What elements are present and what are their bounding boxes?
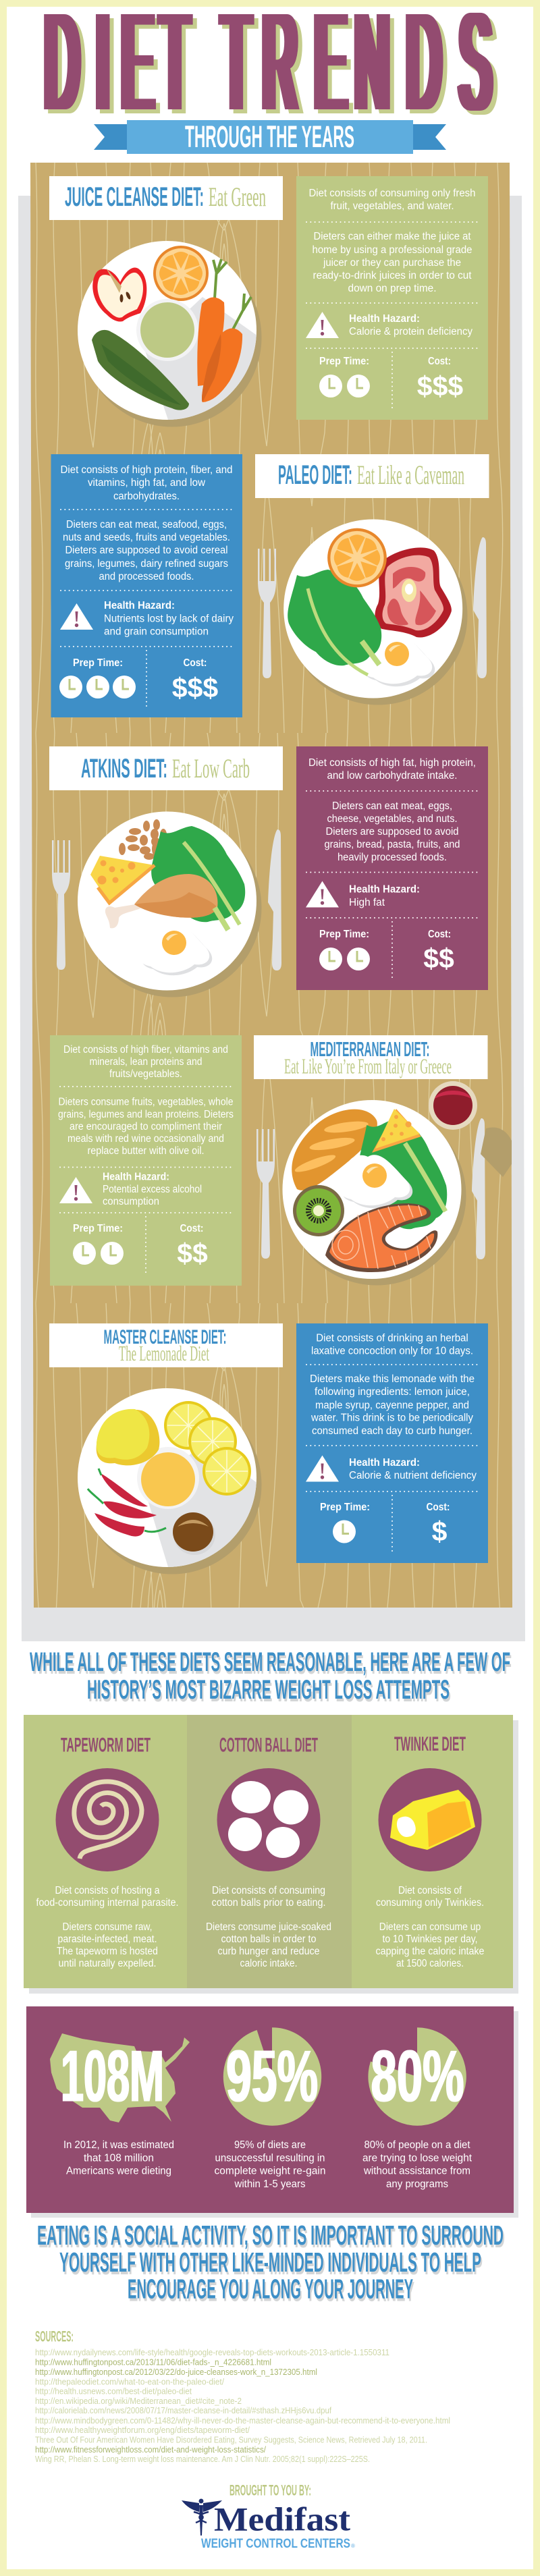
text: how it works: following ingredients: lemon juice, <box>315 1386 470 1398</box>
text: health hazard <box>349 313 473 337</box>
text: what the diet is: minerals, lean proteins and <box>89 1056 202 1068</box>
heading: juice cleanse diet <box>49 176 283 220</box>
text: how it works: cheese, vegetables, and nuts. <box>327 813 458 825</box>
text: how it works: maple syrup, cayenne pepper, and <box>315 1400 469 1411</box>
icon: caduceus <box>182 2498 222 2536</box>
panel: paleo details <box>51 454 242 717</box>
section: juice cleanse diet <box>49 176 488 427</box>
sources: http://www.healthyweightforum.org/eng/diets/tapeworm-diet/ <box>35 2426 250 2435</box>
prep time: Prep Time: <box>320 1502 370 1513</box>
sources: http://calorielab.com/news/2008/07/17/master-cleanse-in-detail/#sthash.zHHjs6vu.dpuf <box>35 2406 331 2415</box>
text: how it works: juicer or they can purchase the <box>323 257 461 269</box>
text: how it works: grains, legumes and lean proteins. Dieters <box>58 1109 234 1120</box>
text: what the diet is: laxative concoction only for 10 days. <box>311 1346 473 1356</box>
icon: fork <box>258 549 276 678</box>
text: how it works <box>310 1373 475 1437</box>
sources: http://health.usnews.com/best-diet/paleo-diet <box>35 2386 192 2396</box>
text: twinkie description: Diet consists of <box>398 1885 462 1896</box>
text: what the diet is <box>63 1044 228 1080</box>
cost <box>177 1223 208 1269</box>
text: health hazard <box>349 884 420 908</box>
column: twinkie diet: TWINKIE DIET <box>394 1733 466 1755</box>
text: how it works: down on prep time. <box>348 283 436 294</box>
text: BROUGHT TO YOU BY: <box>230 2482 311 2498</box>
text: what the diet is: Diet consists of high fiber, vitamins and <box>63 1044 228 1056</box>
cost: Cost: <box>428 929 451 940</box>
cost: $$ <box>423 943 454 974</box>
stat: 95 percent <box>215 2027 325 2190</box>
cost <box>417 356 463 402</box>
plate: meat, greens and egg <box>284 520 467 705</box>
icon: knife <box>472 1118 485 1259</box>
cost <box>427 1502 450 1547</box>
text: twinkie description: to 10 Twinkies per day, <box>382 1934 478 1945</box>
text: tapeworm description: parasite-infected, meat. <box>58 1934 157 1945</box>
heading: mediterranean diet <box>254 1035 487 1079</box>
text: health hazard <box>104 600 234 637</box>
text: health hazard: Health Hazard: <box>349 313 420 325</box>
text: 80 percent description: are trying to lose weight <box>362 2153 473 2164</box>
text: health hazard: Calorie & nutrient deficiency <box>349 1470 477 1481</box>
stat: 108 million: 108M <box>61 2035 164 2118</box>
text: cotton ball description: Diet consists of consuming <box>212 1885 325 1896</box>
text: how it works: Dieters can either make the juice at <box>313 231 471 242</box>
icon: hazard warning <box>59 1177 92 1203</box>
wine glass shadow <box>481 1127 512 1177</box>
heading: atkins diet <box>49 746 283 790</box>
closing statement <box>37 2220 504 2304</box>
prep time <box>320 1502 370 1543</box>
sources <box>35 2328 450 2464</box>
column: tapeworm diet: TAPEWORM DIET <box>61 1734 151 1756</box>
stat: 80 percent: 80% <box>371 2035 464 2118</box>
icon: cotton balls <box>217 1768 320 1871</box>
plate: chicken, cheese, nuts and egg <box>78 811 262 997</box>
icon: fork <box>52 840 70 970</box>
text: health hazard: Health Hazard: <box>103 1172 169 1182</box>
logo: medifast <box>182 2498 355 2551</box>
plate: fruit and vegetables <box>78 241 262 427</box>
text: what the diet is <box>309 188 475 212</box>
text: how it works <box>312 231 473 294</box>
text: how it works: and processed foods. <box>99 571 194 582</box>
section: atkins diet <box>49 746 488 997</box>
sources: http://www.mindbodygreen.com/0-11482/why-ill-never-do-the-master-cleanse-again-but-recommend-it-to-everyone.html <box>35 2416 450 2426</box>
text: twinkie description: Dieters can consume up <box>379 1921 481 1933</box>
text: how it works: heavily processed foods. <box>338 852 447 863</box>
sources: http://en.wikipedia.org/wiki/Mediterranean_diet#cite_note-2 <box>35 2396 242 2406</box>
section: mediterranean diet <box>50 1035 512 1286</box>
prep time <box>319 929 370 970</box>
icon: hazard warning <box>306 1455 339 1482</box>
text: tapeworm description: Dieters consume raw, <box>62 1921 153 1933</box>
text: what the diet is: vitamins, high fat, and low <box>88 477 206 489</box>
cost: Cost: <box>428 356 451 367</box>
text: how it works: Dieters can eat meat, eggs, <box>332 800 452 812</box>
icon: glass of red wine <box>429 1081 477 1130</box>
prep time: Prep Time: <box>319 929 369 940</box>
text: how it works: Dieters are supposed to avoid <box>325 826 459 838</box>
text: health hazard: consumption <box>103 1196 159 1207</box>
icon: twinkie <box>378 1768 482 1871</box>
section: paleo diet <box>51 454 489 717</box>
text: health hazard: Calorie & protein deficiency <box>349 326 473 337</box>
sources: http://www.nydailynews.com/life-style/health/google-reveals-top-diets-workouts-2013-article-1.1550311 <box>35 2348 389 2357</box>
text: health hazard: Potential excess alcohol <box>103 1184 202 1195</box>
column: cotton ball diet <box>206 1734 331 1969</box>
cost: $ <box>432 1516 448 1547</box>
text: tapeworm description <box>36 1885 178 1969</box>
text: how it works <box>63 519 230 582</box>
prep time: Prep Time: <box>73 657 123 669</box>
text: health hazard: Health Hazard: <box>349 1457 420 1469</box>
sources: Three Out Of Four American Women Have Disordered Eating, Survey Suggests, Science News, Retrieved July 18, 2011. <box>35 2435 427 2444</box>
cost <box>423 929 454 974</box>
text: health hazard <box>349 1457 477 1481</box>
cost: $$$ <box>172 672 218 703</box>
sources: http://www.huffingtonpost.ca/2012/03/22/do-juice-cleanses-work_n_1372305.html <box>35 2367 317 2377</box>
pie chart: 80 percent <box>368 2027 466 2126</box>
cost: Cost: <box>184 657 207 669</box>
stat: 80 percent <box>362 2027 473 2190</box>
grey backing panel <box>18 196 525 1641</box>
cost: $$$ <box>417 371 463 402</box>
heading: bizarre weight loss attempts <box>30 1647 510 1705</box>
icon: tapeworm <box>55 1768 159 1871</box>
text: how it works: Dieters are supposed to avoid cereal <box>65 545 228 556</box>
column: tapeworm diet <box>36 1734 178 1969</box>
text: what the diet is <box>61 464 232 502</box>
icon: hazard warning <box>306 881 339 907</box>
text: health hazard: Health Hazard: <box>104 600 175 611</box>
text: cotton ball description: cotton balls prior to eating. <box>212 1897 325 1909</box>
text: how it works: nuts and seeds, fruits and vegetables. <box>63 532 230 543</box>
sources: http://thepaleodiet.com/what-to-eat-on-the-paleo-diet/ <box>35 2377 224 2386</box>
text: how it works: home by using a professional grade <box>312 244 473 256</box>
column: cotton ball diet: COTTON BALL DIET <box>219 1734 318 1756</box>
text: twinkie description: at 1500 calories. <box>396 1958 464 1969</box>
wood table <box>30 163 512 1608</box>
text: 80 percent description: 80% of people on a diet <box>364 2139 470 2151</box>
text: 95 percent description <box>215 2139 325 2190</box>
text: twinkie description <box>375 1885 485 1969</box>
panel: mediterranean details <box>50 1035 242 1286</box>
sources: Wing RR, Phelan S. Long-term weight loss maintenance. Am J Clin Nutr. 2005;82(1 suppl):222S–225S. <box>35 2455 370 2464</box>
icon: knife <box>268 829 281 970</box>
sources: http://www.huffingtonpost.ca/2013/11/06/diet-fads-_n_4226681.html <box>35 2358 271 2367</box>
text: what the diet is: fruit, vegetables, and water. <box>331 200 454 212</box>
stat: 108 million <box>50 2033 190 2177</box>
text: health hazard: Nutrients lost by lack of dairy <box>104 613 234 625</box>
text: how it works: Dieters make this lemonade with the <box>310 1373 475 1385</box>
text: tapeworm description: until naturally expelled. <box>58 1958 157 1969</box>
text: 95 percent description: within 1-5 years <box>234 2178 306 2190</box>
panel: juice cleanse details <box>296 176 488 420</box>
text: what the diet is: Diet consists of drinking an herbal <box>316 1332 468 1344</box>
text: 80 percent description <box>362 2139 473 2190</box>
text: how it works: replace butter with olive oil. <box>88 1145 204 1157</box>
text: how it works: water. This drink is to be periodically <box>310 1412 473 1424</box>
cost <box>172 657 218 703</box>
text: twinkie description: consuming only Twinkies. <box>376 1897 484 1909</box>
prep time <box>319 356 370 398</box>
text: 108 million description: In 2012, it was estimated <box>63 2139 174 2151</box>
text: what the diet is <box>311 1332 473 1356</box>
prep time: Prep Time: <box>319 356 369 367</box>
heading: master cleanse diet <box>49 1323 283 1367</box>
text: cotton ball description: cotton balls in order to <box>221 1934 316 1945</box>
text: how it works: meals with red wine occasionally and <box>68 1133 224 1145</box>
text: cotton ball description <box>206 1885 331 1969</box>
text: twinkie description: capping the caloric intake <box>375 1946 485 1957</box>
text: tapeworm description: food-consuming internal parasite. <box>36 1897 178 1909</box>
text: what the diet is: Diet consists of high protein, fiber, and <box>61 464 232 476</box>
plate: lemons, peppers and syrup <box>78 1388 262 1574</box>
text: what the diet is: carbohydrates. <box>113 491 180 502</box>
icon: knife <box>473 537 487 678</box>
logo: medifast: WEIGHT CONTROL CENTERS <box>201 2537 350 2551</box>
icon: hazard warning <box>60 603 93 630</box>
heading: master cleanse diet: MASTER CLEANSE DIET: <box>104 1326 227 1348</box>
text: 95 percent description: complete weight re-gain <box>215 2165 325 2177</box>
prep time <box>59 657 136 698</box>
heading: paleo diet: PALEO DIET: <box>278 460 352 490</box>
text: how it works: grains, bread, pasta, fruits, and <box>324 839 460 850</box>
text: 108 million description: that 108 million <box>84 2153 154 2164</box>
icon: hazard warning <box>306 312 339 338</box>
map: united states <box>50 2033 190 2122</box>
plate: bread, salmon, kiwi and egg <box>282 1100 466 1285</box>
icon: fork <box>256 1129 275 1259</box>
text: how it works: ready-to-drink juices in order to cut <box>313 270 472 281</box>
pie chart: 95 percent <box>223 2027 321 2126</box>
text: health hazard: Health Hazard: <box>349 884 420 895</box>
text: cotton ball description: curb hunger and reduce <box>217 1946 320 1957</box>
heading: atkins diet: ATKINS DIET: <box>81 754 167 784</box>
cost: Cost: <box>180 1223 204 1234</box>
text: how it works: Dieters consume fruits, vegetables, whole <box>58 1096 234 1108</box>
text: cotton ball description: Dieters consume juice-soaked <box>206 1921 331 1933</box>
prep time <box>73 1223 124 1265</box>
logo: medifast: Medifast <box>214 2500 350 2538</box>
ribbon subtitle: THROUGH THE YEARS <box>185 119 354 154</box>
text: tapeworm description: Diet consists of hosting a <box>55 1885 160 1896</box>
text: health hazard: High fat <box>349 897 385 908</box>
sources: http://www.fitnessforweightloss.com/diet-and-weight-loss-statistics/ <box>35 2445 266 2455</box>
stat: 95 percent: 95% <box>226 2035 318 2118</box>
panel: master cleanse details <box>296 1323 488 1563</box>
text: 108 million description: Americans were dieting <box>66 2165 171 2177</box>
heading: juice cleanse diet: JUICE CLEANSE DIET: <box>65 182 204 212</box>
text: how it works: grains, legumes, dairy refined sugars <box>65 558 228 570</box>
sources: SOURCES: <box>35 2328 74 2345</box>
text: how it works <box>58 1096 234 1157</box>
text: 95 percent description: unsuccessful resulting in <box>215 2153 325 2164</box>
text: 95 percent description: 95% of diets are <box>234 2139 306 2151</box>
column: twinkie diet <box>375 1733 485 1969</box>
text: how it works <box>324 800 460 863</box>
prep time: Prep Time: <box>73 1223 123 1234</box>
text: health hazard: and grain consumption <box>104 626 209 637</box>
text: cotton ball description: caloric intake. <box>240 1958 297 1969</box>
heading: juice cleanse diet: Eat Green <box>209 182 266 212</box>
text: 80 percent description: any programs <box>386 2178 448 2190</box>
text: health hazard <box>103 1172 202 1207</box>
text: what the diet is: Diet consists of consuming only fresh <box>309 188 475 199</box>
panel: dieting statistics <box>26 2006 518 2218</box>
text: 80 percent description: without assistance from <box>363 2165 470 2177</box>
text: how it works: Dieters can eat meat, seafood, eggs, <box>66 519 227 530</box>
text: what the diet is: and low carbohydrate intake. <box>327 770 458 782</box>
section: master cleanse diet <box>49 1323 488 1574</box>
text: 108 million description <box>63 2139 174 2177</box>
panel: atkins details <box>296 746 488 990</box>
text: what the diet is <box>308 757 476 782</box>
logo: medifast: ® <box>351 2543 355 2549</box>
cost: Cost: <box>427 1502 450 1513</box>
text: tapeworm description: The tapeworm is hosted <box>57 1946 158 1957</box>
ribbon subtitle <box>94 119 446 154</box>
heading: master cleanse diet: The Lemonade Diet <box>119 1341 209 1365</box>
text: how it works: are encouraged to compliment their <box>70 1121 222 1132</box>
text: how it works: consumed each day to curb hunger. <box>312 1425 473 1437</box>
text: what the diet is: fruits/vegetables. <box>109 1068 182 1080</box>
heading: atkins diet: Eat Low Carb <box>172 753 250 784</box>
panel: bizarre diets <box>24 1715 518 1994</box>
heading: paleo diet <box>255 454 489 498</box>
text: what the diet is: Diet consists of high fat, high protein, <box>308 757 476 769</box>
cost: $$ <box>177 1238 208 1269</box>
